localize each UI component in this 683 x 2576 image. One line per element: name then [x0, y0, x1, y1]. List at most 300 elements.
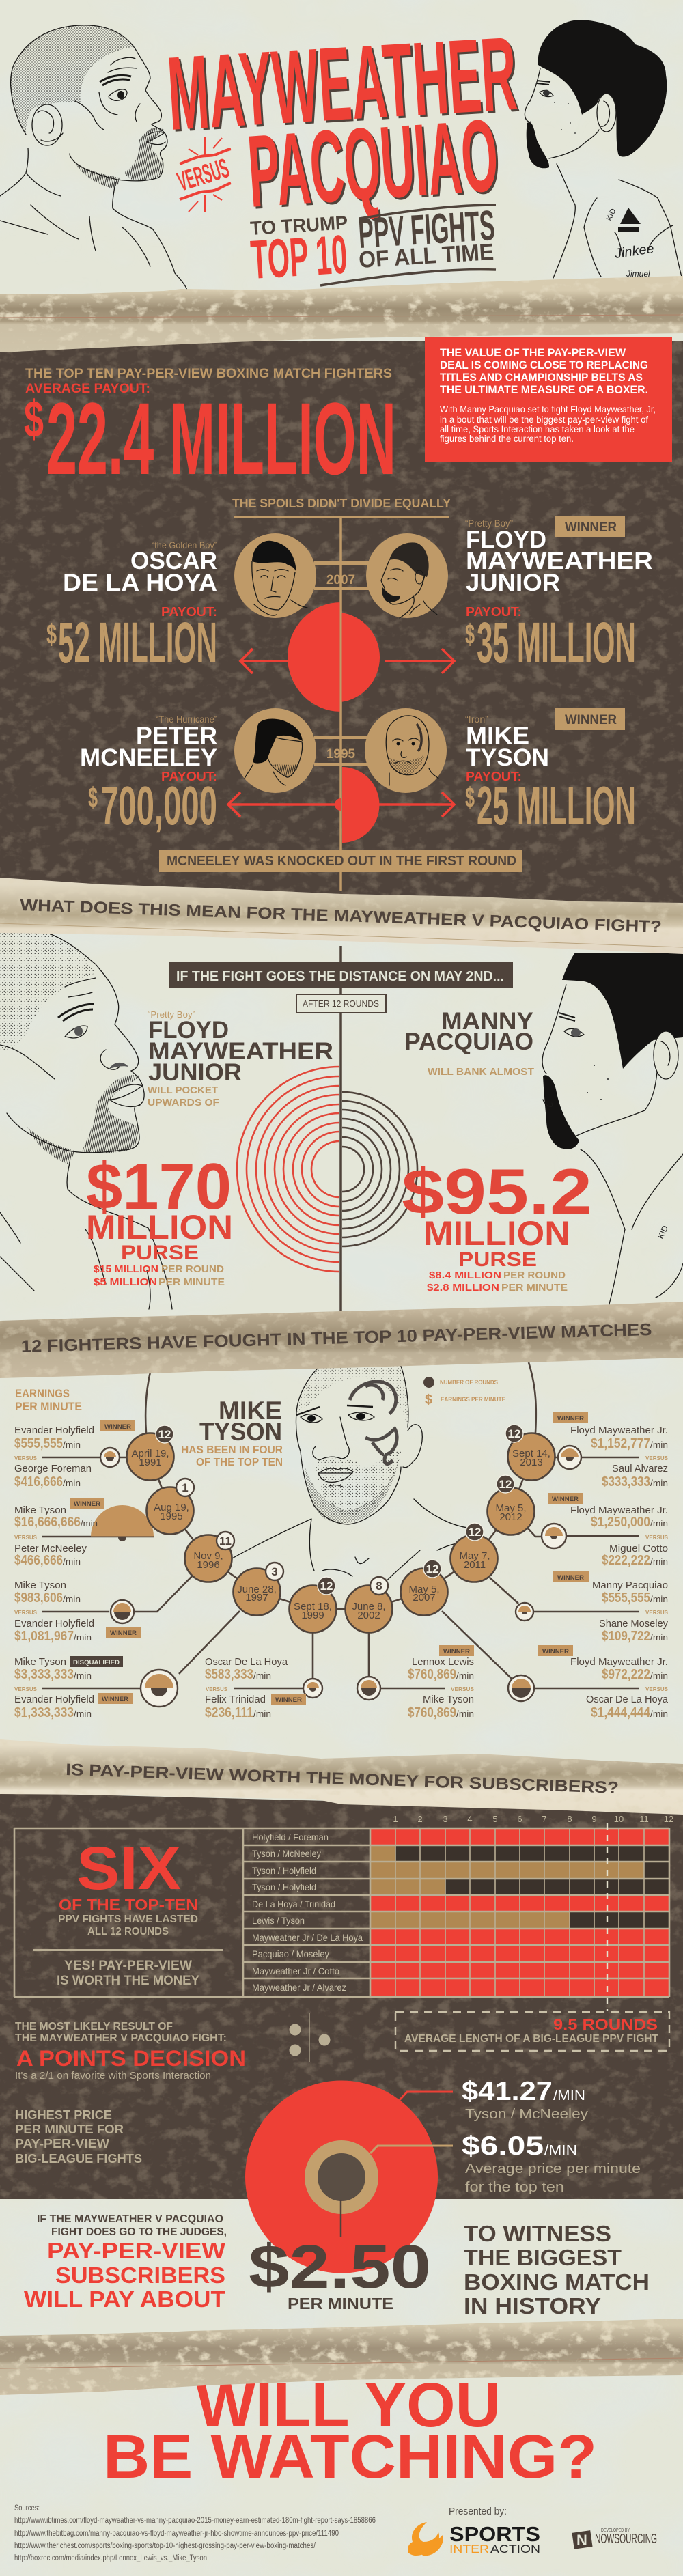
fight circle: June 28 1997 — [234, 1563, 283, 1616]
fighter: Floyd purse: UPWARDS OF — [148, 1097, 219, 1108]
row labels: Mayweather Jr / Cotto — [252, 1965, 339, 1976]
fighter: Peter McNeeley: PAYOUT: — [161, 770, 217, 783]
row labels: Holyfield / Foreman — [252, 1832, 329, 1843]
fight circle: Sept 18 1999 — [290, 1577, 336, 1632]
text block: highest price: PAY-PER-VIEW — [15, 2137, 109, 2151]
panel: red intro box: all time, Sports Interaction has taken a look at the — [440, 424, 635, 434]
round numbers: 9 — [591, 1814, 597, 1824]
stat: 41.27: $41.27 — [462, 2077, 553, 2106]
fighter: Floyd purse: $170 — [86, 1150, 232, 1223]
fighter: Floyd purse: WILL POCKET — [148, 1084, 218, 1096]
sources: http://boxrec.com/media/index.php/Lennox_Lewis_vs._Mike_Tyson — [14, 2554, 207, 2562]
text block: average payout: $ — [24, 391, 44, 449]
fight: Tyson vs Holyfield 1997: DISQUALIFIED — [73, 1659, 120, 1666]
fight: Tyson vs Holyfield 1997: $3,333,333 — [14, 1667, 74, 1682]
logo: Sports Interaction: ACTION — [490, 2543, 540, 2556]
fight: Lewis vs Tyson: /min — [456, 1709, 474, 1719]
stat: 41.27 — [462, 2077, 588, 2122]
legend — [423, 1377, 505, 1408]
fight circle: Aug 19 1995: Aug 19, — [154, 1502, 189, 1513]
fight circle: April 19 1991: 1991 — [139, 1457, 162, 1468]
callout: six of the top ten: SIX — [76, 1834, 181, 1902]
fight: Tyson vs McNeeley: $16,666,666 — [14, 1515, 81, 1530]
fight: Pacquiao vs Moseley: /min — [650, 1594, 668, 1604]
fight: Tyson vs McNeeley: Peter McNeeley — [14, 1543, 87, 1554]
chart: red purse rings — [237, 1067, 339, 1272]
fight: Mayweather vs Cotto — [548, 1493, 668, 1568]
fight circle: May 5 2012: 2012 — [499, 1511, 522, 1523]
versus burst — [174, 137, 232, 212]
node: Lewis Tyson — [357, 1677, 380, 1700]
sources: http://www.ibtimes.com/floyd-mayweather-vs-manny-pacquiao-2015-money-earn-estimated-180m-fight-report-says-1858866 — [14, 2517, 376, 2525]
text block: average payout — [24, 367, 396, 496]
fighter: Manny purse: PACQUIAO — [404, 1028, 533, 1055]
fight circle: June 28 1997: June 28, — [237, 1584, 277, 1595]
logo: NowSourcing — [572, 2528, 657, 2549]
callout: 9.5 rounds dashed: 9.5 ROUNDS — [553, 2016, 658, 2033]
panel: top ten dark background — [0, 341, 683, 908]
fight: De La Hoya vs Trinidad: Oscar De La Hoya — [205, 1656, 288, 1668]
text block: judges: FIGHT DOES GO TO THE JUDGES, — [51, 2226, 227, 2238]
text block: judges: SUBSCRIBERS — [55, 2263, 225, 2288]
fighter: Floyd purse: $15 MILLION — [94, 1263, 158, 1275]
fight: Tyson vs McNeeley: WINNER — [74, 1500, 100, 1508]
round numbers: 6 — [517, 1814, 522, 1824]
text block: judges — [24, 2213, 227, 2312]
timeline connector lines — [42, 1362, 639, 1688]
winner tag — [555, 516, 625, 537]
ovals 1995 — [234, 708, 447, 793]
callout: knocked out — [159, 850, 522, 872]
fight: Mayweather vs Alvarez — [553, 1412, 668, 1489]
round numbers: 1 — [393, 1814, 398, 1824]
sources: http://www.thebitbag.com/manny-pacquiao-vs-floyd-mayweather-jr-hbo-showtime-announces-ppv-price/111490 — [14, 2530, 339, 2538]
node: Pacquiao Moseley — [516, 1603, 533, 1621]
fight: Holyfield vs Foreman: $555,555 — [14, 1436, 63, 1451]
fight: Mayweather vs Cotto: Floyd Mayweather Jr. — [570, 1504, 668, 1516]
portrait: Tyson small — [386, 716, 438, 785]
fight: Holyfield vs Foreman: $416,666 — [14, 1474, 63, 1489]
fight circle: May 7 2011: May 7, — [459, 1550, 490, 1562]
fight circle: April 19 1991: April 19, — [131, 1448, 169, 1459]
round numbers: 7 — [542, 1814, 547, 1824]
fight circle: Sept 14 2013: 2013 — [520, 1457, 543, 1468]
text block: average payout: AVERAGE PAYOUT: — [25, 382, 150, 396]
fight: Tyson vs Holyfield 1997: Evander Holyfield — [14, 1694, 94, 1705]
fight circle: Sept 18 1999: Sept 18, — [294, 1601, 332, 1612]
node: Mayweather De La Hoya — [508, 1675, 534, 1701]
callout: 9.5 rounds dashed: AVERAGE LENGTH OF A BIG-LEAGUE PPV FIGHT — [404, 2033, 659, 2045]
fight circle: May 7 2011 — [451, 1523, 497, 1582]
fight circle: May 5 2012 — [488, 1475, 534, 1535]
fight: Pacquiao vs Moseley: Manny Pacquiao — [592, 1580, 668, 1591]
fighter: Floyd Mayweather Junior: FLOYD — [466, 527, 546, 553]
text block: judges: WILL PAY ABOUT — [24, 2286, 225, 2312]
fighter: Oscar De La Hoya: “the Golden Boy” — [152, 540, 217, 550]
callout: six of the top ten: ALL 12 ROUNDS — [87, 1926, 169, 1937]
fighter: Oscar De La Hoya: 52 MILLION — [58, 611, 217, 675]
panel: red intro box: DEAL IS COMING CLOSE TO REPLACING — [440, 359, 648, 372]
dashed average marker — [607, 1823, 608, 2011]
stat: 2.50 per minute: PER MINUTE — [288, 2295, 393, 2312]
text block: highest price: HIGHEST PRICE — [15, 2108, 112, 2122]
fighter: Floyd purse: MAYWEATHER — [148, 1038, 333, 1065]
fight: Mayweather vs De La Hoya — [538, 1645, 669, 1720]
logo: NowSourcing: N — [576, 2532, 587, 2549]
logo: Sports Interaction: INTER — [449, 2543, 489, 2556]
logo: NowSourcing: DEVELOPED BY — [601, 2528, 630, 2533]
heading: Mike Tyson top ten: TYSON — [199, 1418, 282, 1446]
texture: dark panel one — [0, 341, 683, 908]
tattoo: kid: KID — [605, 208, 617, 222]
subtitle: to trump top 10: OF ALL TIME — [358, 239, 494, 273]
fighter: Floyd purse: PURSE — [121, 1242, 199, 1264]
fight: De La Hoya vs Trinidad: /min — [253, 1670, 271, 1681]
round numbers: 11 — [639, 1814, 649, 1824]
heading: Mike Tyson top ten: OF THE TOP TEN — [196, 1457, 283, 1468]
chart: price per minute circles — [245, 2080, 453, 2273]
row labels: Lewis / Tyson — [252, 1915, 305, 1926]
heading: 12 fighters: 12 FIGHTERS HAVE FOUGHT IN THE TOP 10 PAY-PER-VIEW MATCHES — [20, 1320, 652, 1356]
callout: six of the top ten — [33, 1834, 223, 1988]
panel: red intro box: THE VALUE OF THE PAY-PER-VIEW — [440, 346, 626, 359]
fight: Tyson vs Holyfield 1996: Mike Tyson — [14, 1580, 66, 1591]
fight circle: Sept 18 1999: 12 — [320, 1580, 333, 1593]
fight circle: June 8 2002: 2002 — [357, 1610, 380, 1621]
fighter: Manny purse: PURSE — [458, 1248, 537, 1271]
closing headline — [103, 2370, 597, 2491]
chart: rounds grid — [14, 1814, 673, 2011]
icon: boxing bell dots — [290, 2013, 331, 2062]
fight: Mayweather vs De La Hoya: WINNER — [542, 1648, 569, 1655]
fight circle: Sept 14 2013 — [505, 1425, 555, 1481]
callout: 9.5 rounds dashed — [395, 2012, 669, 2051]
heading: Mike Tyson top ten — [181, 1397, 283, 1468]
torn band five — [0, 2319, 683, 2395]
axis bar and vertical line — [234, 517, 449, 891]
versus burst: VERSUS — [174, 153, 232, 197]
fight: De La Hoya vs Trinidad: WINNER — [275, 1696, 302, 1704]
text block: judges: IF THE MAYWEATHER V PACQUIAO — [37, 2213, 223, 2225]
fight: Mayweather vs De La Hoya: $1,444,444 — [591, 1705, 651, 1720]
fight: Mayweather vs Cotto: Miguel Cotto — [609, 1543, 668, 1554]
fight: Mayweather vs Alvarez: /min — [650, 1478, 668, 1488]
fight circle: May 5 2007: May 5, — [408, 1584, 440, 1595]
fight: Mayweather vs Alvarez: Floyd Mayweather Jr. — [570, 1425, 668, 1436]
portrait: Mayweather small — [381, 542, 437, 618]
round numbers: 2 — [417, 1814, 423, 1824]
node: Tyson Holyfield — [111, 1600, 134, 1623]
fighter: Peter McNeeley: $ — [88, 781, 98, 813]
fight circle: April 19 1991 — [127, 1425, 173, 1481]
closing headline: WILL YOU — [196, 2370, 501, 2440]
fight: Mayweather vs De La Hoya: Oscar De La Hoya — [586, 1694, 669, 1705]
fight circle: June 8 2002: 8 — [376, 1580, 382, 1593]
stat: 6.05: Average price per minute — [465, 2161, 641, 2176]
fight circle: Nov 9 1996 — [184, 1532, 234, 1582]
row labels: Mayweather Jr / Alvarez — [252, 1982, 346, 1993]
fight: Tyson vs McNeeley: /min — [81, 1518, 98, 1528]
fighter: Manny purse: PER MINUTE — [501, 1282, 568, 1293]
fight: Tyson vs Holyfield 1996: VERSUS — [14, 1609, 37, 1616]
text block: points decision — [15, 2021, 246, 2082]
row labels — [252, 1832, 363, 1993]
stat: 41.27: /MIN — [553, 2088, 585, 2103]
fight circle: April 19 1991: 12 — [158, 1428, 171, 1441]
round numbers: 5 — [492, 1814, 498, 1824]
fighter: Manny purse: $8.4 MILLION — [429, 1270, 501, 1281]
fight: Mayweather vs Alvarez: $333,333 — [602, 1474, 650, 1489]
row labels: Mayweather Jr / De La Hoya — [252, 1932, 363, 1943]
fight circle: Sept 18 1999: 1999 — [301, 1610, 324, 1621]
panel: red intro box: With Manny Pacquiao set to fight Floyd Mayweather, Jr, — [440, 404, 656, 415]
fight: Tyson vs Holyfield 1997 — [14, 1656, 133, 1720]
fighter: Oscar De La Hoya — [46, 540, 217, 675]
fight: Lewis vs Tyson: Mike Tyson — [423, 1694, 474, 1705]
fight circle: Sept 14 2013: 12 — [508, 1427, 520, 1440]
fighter: Oscar De La Hoya: PAYOUT: — [161, 605, 217, 619]
panel: subscribers dark background — [0, 1793, 683, 2199]
panel: red intro box: figures behind the current top ten. — [440, 434, 574, 444]
closing headline: BE WATCHING? — [103, 2423, 597, 2491]
fight circle: Aug 19 1995 — [146, 1479, 194, 1534]
row labels: Tyson / Holyfield — [252, 1865, 316, 1876]
fight: Lewis vs Tyson: VERSUS — [451, 1685, 474, 1692]
fight: Pacquiao vs Moseley — [553, 1571, 668, 1644]
text block: points decision: THE MAYWEATHER V PACQUIAO FIGHT: — [15, 2032, 227, 2044]
fighter: Peter McNeeley: 700,000 — [100, 775, 217, 836]
filled round bars — [371, 1828, 669, 1996]
text block: judges: PAY-PER-VIEW — [47, 2238, 226, 2263]
portrait: Mayweather hero — [0, 25, 187, 290]
fight circle: June 28 1997: 1997 — [245, 1592, 268, 1604]
fighter: Floyd purse: PER MINUTE — [158, 1276, 225, 1288]
presented by: Presented by: — [449, 2506, 507, 2517]
fight: Pacquiao vs Moseley: Shane Moseley — [599, 1618, 668, 1629]
divider line: will bank section — [339, 946, 342, 1311]
fight: Mayweather vs Alvarez: WINNER — [557, 1415, 584, 1423]
fighter: Oscar De La Hoya: DE LA HOYA — [63, 570, 217, 596]
fight: Tyson vs McNeeley: $466,666 — [14, 1553, 63, 1568]
fight circle: June 28 1997: 3 — [271, 1565, 278, 1578]
fighter: Manny purse — [402, 1008, 592, 1293]
stat: 6.05: $6.05 — [462, 2131, 544, 2161]
fight: Tyson vs McNeeley: VERSUS — [14, 1534, 37, 1541]
tattoo: kid: Jinkee — [613, 241, 655, 262]
round numbers: 12 — [664, 1814, 673, 1824]
fight: Holyfield vs Foreman: VERSUS — [14, 1455, 37, 1461]
fight circle: June 8 2002: June 8, — [352, 1601, 386, 1612]
fight: Lewis vs Tyson: /min — [456, 1670, 474, 1681]
fight: De La Hoya vs Trinidad — [205, 1656, 306, 1720]
torn band three — [0, 1302, 683, 1378]
fight: Mayweather vs Cotto: VERSUS — [645, 1534, 668, 1541]
stat: 6.05: /MIN — [544, 2143, 577, 2158]
subtitle: to trump top 10 — [249, 202, 496, 290]
fighter: Peter McNeeley: PETER — [136, 723, 217, 749]
text block: to witness: THE BIGGEST — [464, 2245, 622, 2270]
fighter: Floyd purse: FLOYD — [148, 1017, 229, 1044]
text block: points decision: A POINTS DECISION — [16, 2046, 246, 2071]
text block: average payout: THE TOP TEN PAY-PER-VIEW BOXING MATCH FIGHTERS — [25, 367, 392, 381]
texture: dark panel two — [0, 1793, 683, 2199]
fight: Mayweather vs Cotto: /min — [650, 1556, 668, 1567]
fight circle: Sept 14 2013: Sept 14, — [512, 1448, 550, 1459]
legend: NUMBER OF ROUNDS — [440, 1379, 498, 1386]
fight: Holyfield vs Foreman — [14, 1420, 135, 1489]
fighter: Floyd Mayweather Junior: PAYOUT: — [466, 605, 522, 619]
round numbers: 4 — [467, 1814, 473, 1824]
fight: Mayweather vs De La Hoya: Floyd Mayweather Jr. — [570, 1656, 668, 1668]
fighter: Floyd purse — [86, 1009, 333, 1288]
text block: points decision: It's a 2/1 on favorite with Sports Interaction — [15, 2071, 211, 2082]
fight: Tyson vs Holyfield 1996: WINNER — [110, 1629, 137, 1637]
row labels: De La Hoya / Trinidad — [252, 1899, 335, 1909]
fight: Lewis vs Tyson — [408, 1645, 474, 1720]
fighter: Mike Tyson: TYSON — [466, 744, 549, 771]
winner tag: WINNER — [565, 713, 617, 727]
round numbers: 8 — [567, 1814, 572, 1824]
fight: De La Hoya vs Trinidad: $583,333 — [205, 1667, 253, 1682]
text block: to witness: TO WITNESS — [464, 2221, 611, 2246]
fight: Tyson vs Holyfield 1997: $1,333,333 — [14, 1705, 74, 1720]
stat: 41.27: Tyson / McNeeley — [465, 2107, 588, 2122]
node: Tyson Holyfield disqualified — [141, 1670, 178, 1707]
tattoo: kid — [605, 208, 655, 279]
fight: Holyfield vs Foreman: Evander Holyfield — [14, 1425, 94, 1436]
callout: knocked out: MCNEELEY WAS KNOCKED OUT IN THE FIRST ROUND — [167, 854, 516, 869]
fighter: Manny purse: WILL BANK ALMOST — [428, 1066, 534, 1078]
sources: http://www.therichest.com/sports/boxing-sports/top-10-highest-grossing-pay-per-view-boxing-matches/ — [14, 2542, 316, 2550]
fighter: Mike Tyson — [465, 708, 636, 836]
fight: Holyfield vs Foreman: /min — [63, 1440, 81, 1450]
fight: Tyson vs McNeeley — [14, 1498, 104, 1568]
fighter: Floyd Mayweather Junior: JUNIOR — [466, 570, 560, 596]
fight: De La Hoya vs Trinidad: /min — [253, 1709, 271, 1719]
tag: after 12 rounds — [296, 994, 386, 1013]
winner tag: WINNER — [565, 520, 617, 535]
fighter: Oscar De La Hoya: $ — [46, 618, 57, 650]
text block: highest price: BIG-LEAGUE FIGHTS — [15, 2152, 142, 2166]
fight: Pacquiao vs Moseley: $555,555 — [602, 1591, 650, 1606]
legend: $ — [425, 1392, 432, 1408]
text block: to witness — [464, 2221, 650, 2319]
fight: Tyson vs Holyfield 1997: VERSUS — [14, 1685, 37, 1692]
fight: Mayweather vs De La Hoya: VERSUS — [645, 1685, 668, 1692]
fight: Mayweather vs Cotto: $222,222 — [602, 1553, 650, 1568]
tag: after 12 rounds: AFTER 12 ROUNDS — [303, 998, 379, 1009]
fighter: Peter McNeeley: MCNEELEY — [80, 744, 217, 771]
fight: Tyson vs Holyfield 1996: $1,081,967 — [14, 1629, 74, 1644]
chart: payout 2007 red semicircles — [240, 602, 454, 712]
logo: Sports Interaction — [408, 2522, 540, 2556]
fighter: Oscar De La Hoya: OSCAR — [130, 548, 217, 574]
fight: Tyson vs Holyfield 1997: /min — [74, 1670, 92, 1681]
fight: Tyson vs McNeeley: Mike Tyson — [14, 1504, 66, 1516]
fighter: Floyd Mayweather Junior: $ — [465, 618, 475, 650]
fighter: Floyd purse: PER ROUND — [161, 1263, 224, 1275]
panel: red intro box: in a bout that will be the biggest pay-per-view fight of — [440, 415, 648, 425]
callout: if the fight goes the distance: IF THE FIGHT GOES THE DISTANCE ON MAY 2ND... — [176, 969, 504, 984]
portrait: Mayweather large — [0, 933, 172, 1309]
fight: Mayweather vs Cotto: $1,250,000 — [591, 1515, 650, 1530]
fight circle: Aug 19 1995: 1995 — [160, 1511, 183, 1522]
text block: highest price: PER MINUTE FOR — [15, 2123, 124, 2136]
fighter: Manny purse: $95.2 — [402, 1156, 592, 1227]
node: Mayweather Cotto — [542, 1524, 566, 1548]
text block: to witness: BOXING MATCH — [464, 2269, 650, 2295]
sources: Sources: — [14, 2504, 40, 2512]
fight: Mayweather vs Alvarez: Saul Alvarez — [612, 1463, 668, 1474]
subtitle: to trump top 10: TO TRUMP — [249, 212, 348, 239]
fight: Lewis vs Tyson: Lennox Lewis — [412, 1656, 474, 1668]
fight: De La Hoya vs Trinidad: $236,111 — [205, 1705, 253, 1720]
panel: red intro box — [425, 337, 672, 462]
fight: Mayweather vs De La Hoya: /min — [650, 1709, 668, 1719]
fight: Lewis vs Tyson: WINNER — [443, 1648, 470, 1655]
fight circle: May 5 2012: May 5, — [495, 1502, 527, 1514]
fight circle: June 8 2002 — [346, 1577, 392, 1632]
callout: six of the top ten: IS WORTH THE MONEY — [57, 1974, 199, 1988]
panel: red intro box: THE ULTIMATE MEASURE OF A BOXER. — [440, 383, 648, 396]
portrait: De La Hoya — [252, 541, 307, 615]
fighter: Floyd purse: $5 MILLION — [94, 1276, 157, 1288]
fight: Pacquiao vs Moseley: VERSUS — [645, 1609, 668, 1616]
fight: Tyson vs Holyfield 1997: /min — [74, 1709, 92, 1719]
heading: Mike Tyson top ten: HAS BEEN IN FOUR — [181, 1444, 283, 1456]
fighter: Floyd Mayweather Junior: “Pretty Boy” — [465, 518, 513, 529]
fight: Pacquiao vs Moseley: /min — [650, 1632, 668, 1642]
fight: Mayweather vs Alvarez: VERSUS — [645, 1455, 668, 1461]
title: Mayweather Pacquiao — [165, 15, 520, 229]
fight: De La Hoya vs Trinidad: Felix Trinidad — [205, 1694, 266, 1705]
tattoo: kid: Jimuel — [626, 269, 650, 279]
fighter: Mike Tyson: “Iron” — [465, 714, 488, 725]
fight: Mayweather vs Cotto: /min — [650, 1518, 668, 1528]
stat: 2.50 per minute: $2.50 — [249, 2233, 431, 2301]
subtitle: to trump top 10: TOP 10 — [249, 224, 349, 290]
round numbers: 3 — [443, 1814, 448, 1824]
heading: earnings per minute: EARNINGS — [15, 1387, 70, 1400]
fight: Mayweather vs Alvarez: /min — [650, 1440, 668, 1450]
round numbers — [393, 1814, 673, 1824]
fight: Tyson vs Holyfield 1996: /min — [74, 1632, 92, 1642]
legend: EARNINGS PER MINUTE — [441, 1396, 505, 1403]
fight circle: May 5 2007: 12 — [426, 1563, 438, 1576]
callout: six of the top ten: YES! PAY-PER-VIEW — [64, 1959, 192, 1973]
fighter: Manny purse: MANNY — [441, 1008, 533, 1035]
row labels: Pacquiao / Moseley — [252, 1948, 329, 1959]
chart: dark purse rings — [342, 1092, 417, 1246]
round numbers: 10 — [614, 1814, 624, 1824]
fight: Mayweather vs Alvarez: $1,152,777 — [591, 1436, 650, 1451]
portrait: Tyson large — [231, 1362, 469, 1608]
row labels: Tyson / Holyfield — [252, 1881, 316, 1892]
fight circle: May 5 2012: 12 — [499, 1478, 512, 1491]
fighter: Floyd purse: MILLION — [86, 1208, 233, 1246]
fighter: Floyd Mayweather Junior — [465, 516, 653, 675]
empty cells — [371, 1828, 669, 1996]
subtitle: to trump top 10: PPV FIGHTS — [357, 202, 496, 257]
portrait: Pacquiao large: KID — [656, 1224, 670, 1240]
fighter: Peter McNeeley — [80, 714, 217, 836]
heading: earnings per minute — [15, 1387, 82, 1413]
fight circle: Nov 9 1996: 1996 — [197, 1559, 220, 1571]
ovals 2007 — [234, 533, 448, 618]
fight: Tyson vs Holyfield 1997: Mike Tyson — [14, 1656, 66, 1668]
fight circle: Nov 9 1996: Nov 9, — [193, 1550, 223, 1562]
text block: highest price — [15, 2108, 142, 2166]
